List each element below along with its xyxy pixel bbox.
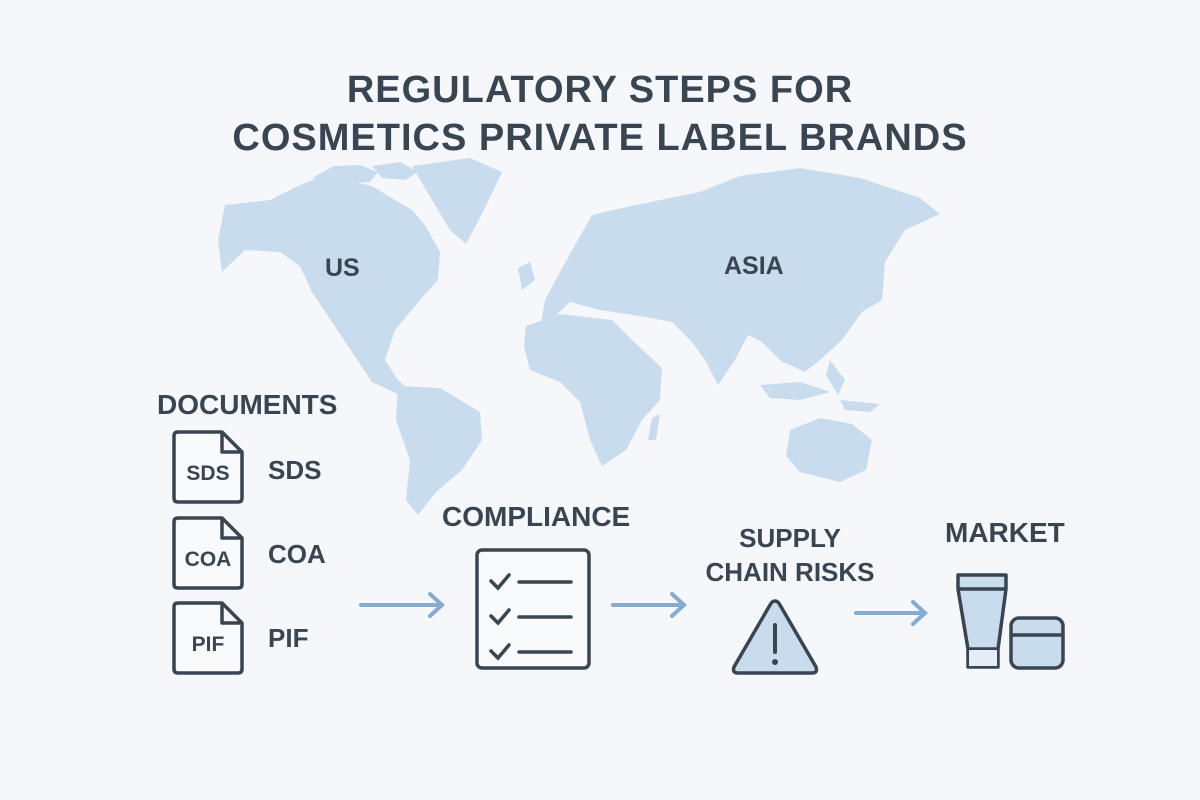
icon: cosmetic products [956, 573, 1065, 670]
icon: PIF document [172, 601, 244, 675]
map: arctic islands [312, 162, 418, 184]
icon: checklist [475, 548, 591, 670]
label: US: US [325, 254, 360, 282]
map: north america [218, 178, 440, 396]
heading: supply chain risks [705, 523, 874, 587]
label: ASIA: ASIA [724, 252, 784, 280]
heading: market: MARKET [945, 517, 1065, 548]
map: south america [396, 386, 482, 515]
icon: SDS document: SDS [186, 462, 230, 485]
map: madagascar [648, 414, 660, 440]
arrow 1 [359, 592, 445, 618]
heading: documents: DOCUMENTS [157, 389, 337, 420]
icon: COA document: COA [185, 548, 231, 571]
title [232, 69, 968, 159]
title: REGULATORY STEPS FOR [347, 69, 853, 111]
map: australia [786, 418, 872, 482]
label: COA: COA [268, 539, 326, 569]
map: indonesia [760, 360, 880, 412]
map: uk [518, 262, 535, 290]
icon: SDS document [172, 430, 244, 504]
heading: compliance: COMPLIANCE [442, 501, 630, 532]
icon: COA document [172, 516, 244, 590]
icon: warning triangle [732, 599, 818, 675]
arrow 3 [854, 600, 928, 626]
map: eurasia [540, 168, 940, 385]
label: PIF: PIF [268, 623, 308, 653]
map: greenland [412, 158, 502, 244]
heading: supply chain risks: SUPPLY [739, 523, 841, 553]
map: africa [524, 314, 662, 466]
heading: supply chain risks: CHAIN RISKS [705, 557, 874, 587]
icon: PIF document: PIF [192, 633, 225, 656]
title: COSMETICS PRIVATE LABEL BRANDS [232, 117, 968, 159]
arrow 2 [611, 592, 687, 618]
label: SDS: SDS [268, 455, 321, 485]
